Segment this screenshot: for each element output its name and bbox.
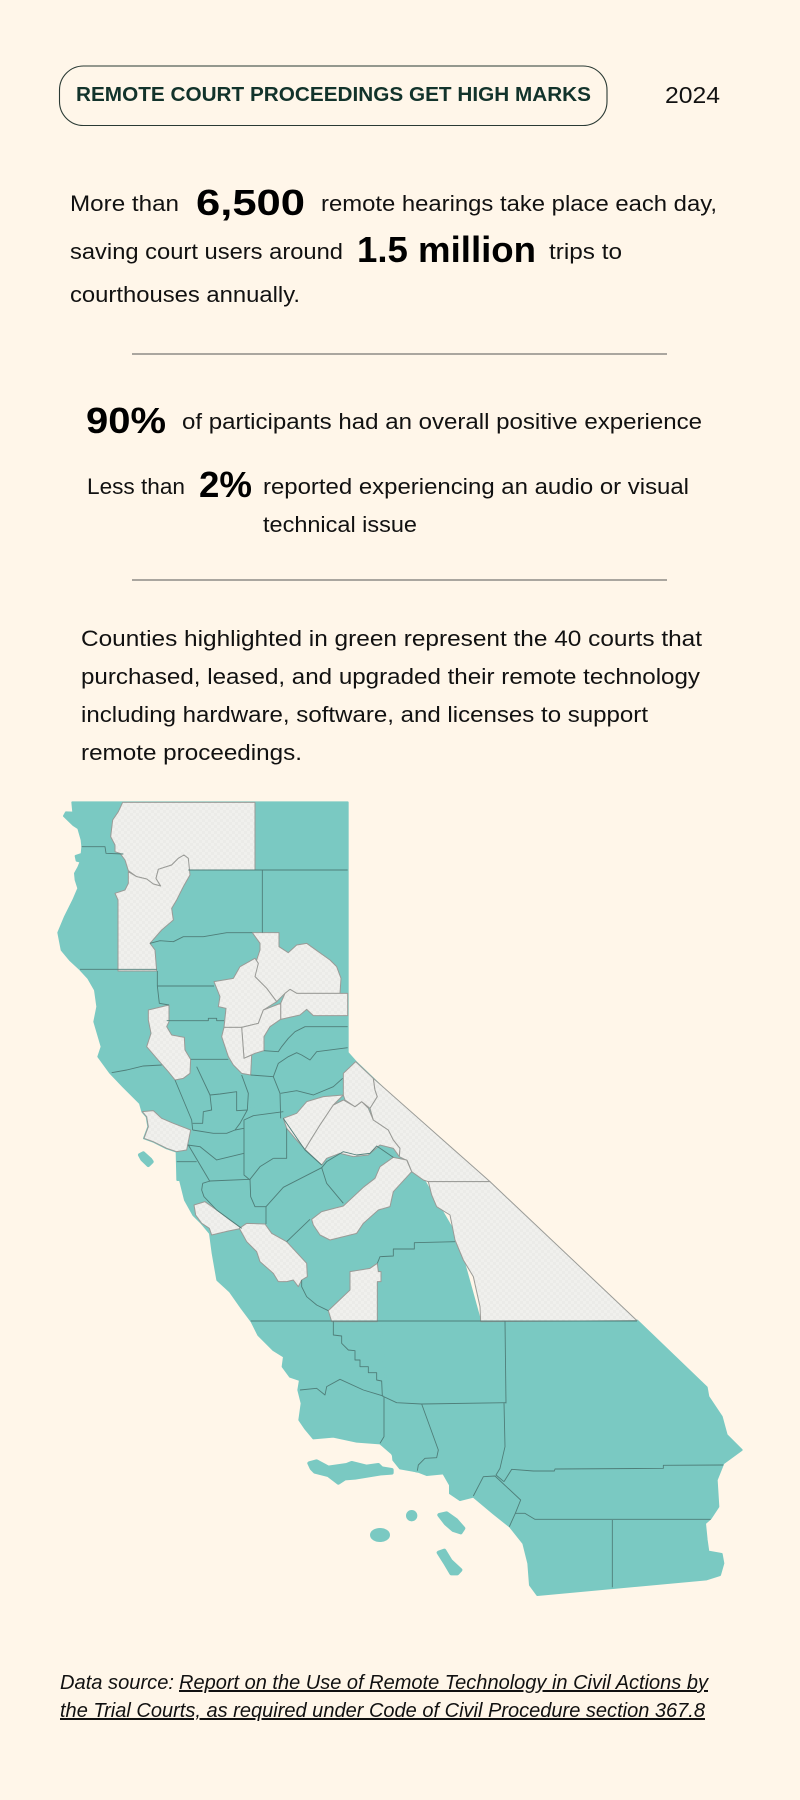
- year: 2024: [665, 82, 720, 108]
- text block: map description: including hardware, software, and licenses to support: [81, 702, 648, 727]
- text block: remote hearings: saving court users around: [70, 239, 343, 264]
- map: California counties: [58, 802, 742, 1595]
- text block: remote hearings: remote hearings take place each day,: [321, 191, 717, 216]
- text block: remote hearings: 1.5 million: [357, 229, 536, 270]
- text block: participant experience: of participants had an overall positive experience: [182, 409, 702, 434]
- text block: remote hearings: More than: [70, 191, 179, 216]
- islands: [140, 1153, 463, 1573]
- data source footer: Data source:: [60, 1672, 174, 1694]
- county borders: south: [473, 1403, 723, 1587]
- text block: map description: remote proceedings.: [81, 740, 302, 765]
- data source footer: Report on the Use of Remote Technology in Civil Actions by: [179, 1672, 709, 1694]
- gray counties: central: [194, 1078, 637, 1322]
- text block: map description: purchased, leased, and upgraded their remote technology: [81, 664, 700, 689]
- text block: participant experience: technical issue: [263, 512, 417, 537]
- text block: participant experience: 2%: [199, 464, 252, 505]
- title pill: [60, 66, 607, 126]
- gray counties: north: [111, 802, 400, 1165]
- text block: remote hearings: 6,500: [196, 182, 305, 223]
- text block: remote hearings: courthouses annually.: [70, 282, 300, 307]
- text block: participant experience: [86, 400, 702, 537]
- text block: remote hearings: trips to: [549, 239, 622, 264]
- county borders: north: [80, 847, 348, 1180]
- text block: remote hearings: [70, 182, 717, 307]
- data source footer: the Trial Courts, as required under Code of Civil Procedure section 367.8: [60, 1700, 705, 1722]
- text block: participant experience: reported experiencing an audio or visual: [263, 474, 689, 499]
- green county land: [58, 802, 742, 1595]
- text block: participant experience: 90%: [86, 400, 166, 441]
- title pill: REMOTE COURT PROCEEDINGS GET HIGH MARKS: [76, 84, 591, 106]
- text block: map description: Counties highlighted in green represent the 40 courts that: [81, 626, 702, 651]
- text block: map description: [81, 626, 702, 765]
- data source footer: [60, 1672, 709, 1722]
- county borders: central: [188, 1118, 637, 1471]
- text block: participant experience: Less than: [87, 474, 185, 499]
